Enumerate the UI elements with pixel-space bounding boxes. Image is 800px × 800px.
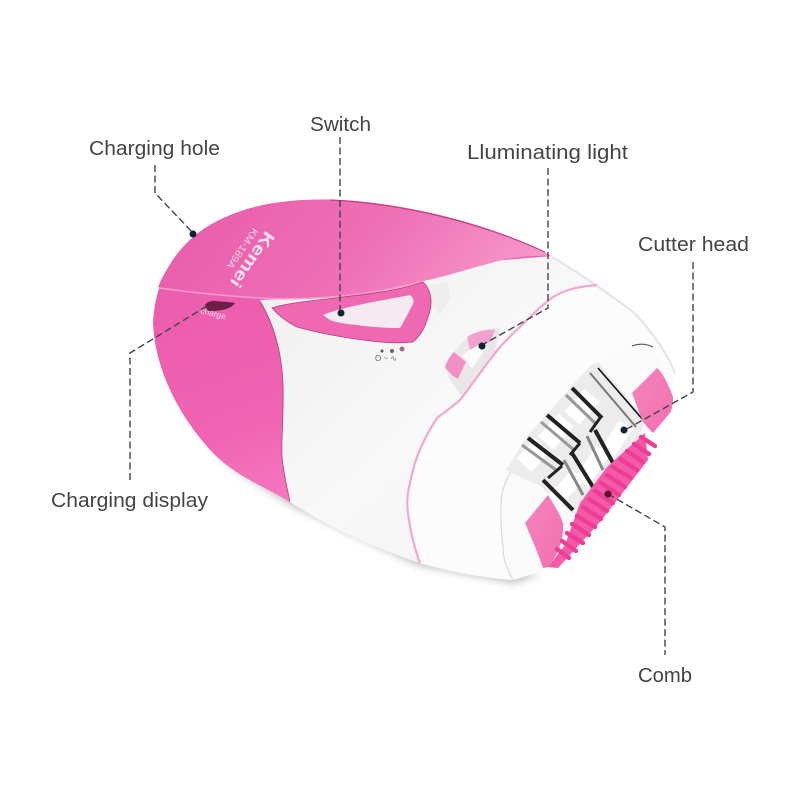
callout: illuminating light: [467, 142, 628, 350]
body pink shell: [153, 200, 552, 502]
cap pink seam: [407, 285, 597, 563]
callout: charging display: [51, 306, 208, 512]
shadow: [215, 458, 540, 583]
brand text: [217, 221, 278, 291]
callout: comb: Comb: [638, 665, 692, 687]
callout: switch: Switch: [310, 114, 371, 136]
callout: cutter head: Cutter head: [638, 234, 749, 256]
device: epilator: [153, 200, 675, 583]
comb: [548, 433, 655, 568]
switch housing: [272, 282, 431, 343]
callout: comb: [604, 490, 692, 687]
switch button: [323, 295, 414, 328]
body white middle section: [260, 256, 600, 580]
callout: charging hole: Charging hole: [89, 138, 220, 160]
cap recess: [501, 344, 672, 580]
upper pink pad: [632, 368, 673, 433]
callout: charging display: Charging display: [51, 490, 208, 512]
cutter ridges: [528, 388, 602, 465]
brand text: KM-189A: [224, 225, 260, 271]
rollers: [524, 395, 592, 465]
callout: charging hole: [89, 138, 220, 238]
callout: switch: [310, 114, 371, 316]
brand text: Kemei: [226, 228, 278, 291]
cutter discs: [506, 362, 646, 517]
cap white front: [407, 283, 675, 580]
mode indicators: O ~ ∿: [375, 354, 397, 363]
light window: [445, 328, 500, 397]
callout: illuminating light: Lluminating light: [467, 142, 628, 164]
top pink panel: [158, 200, 552, 299]
charging port: charge: [200, 306, 227, 321]
callout: cutter head: [620, 234, 749, 434]
lower pink pad: [525, 495, 563, 568]
switch recess: [428, 282, 450, 315]
charging port: [200, 301, 235, 321]
mode indicators: [375, 346, 404, 363]
